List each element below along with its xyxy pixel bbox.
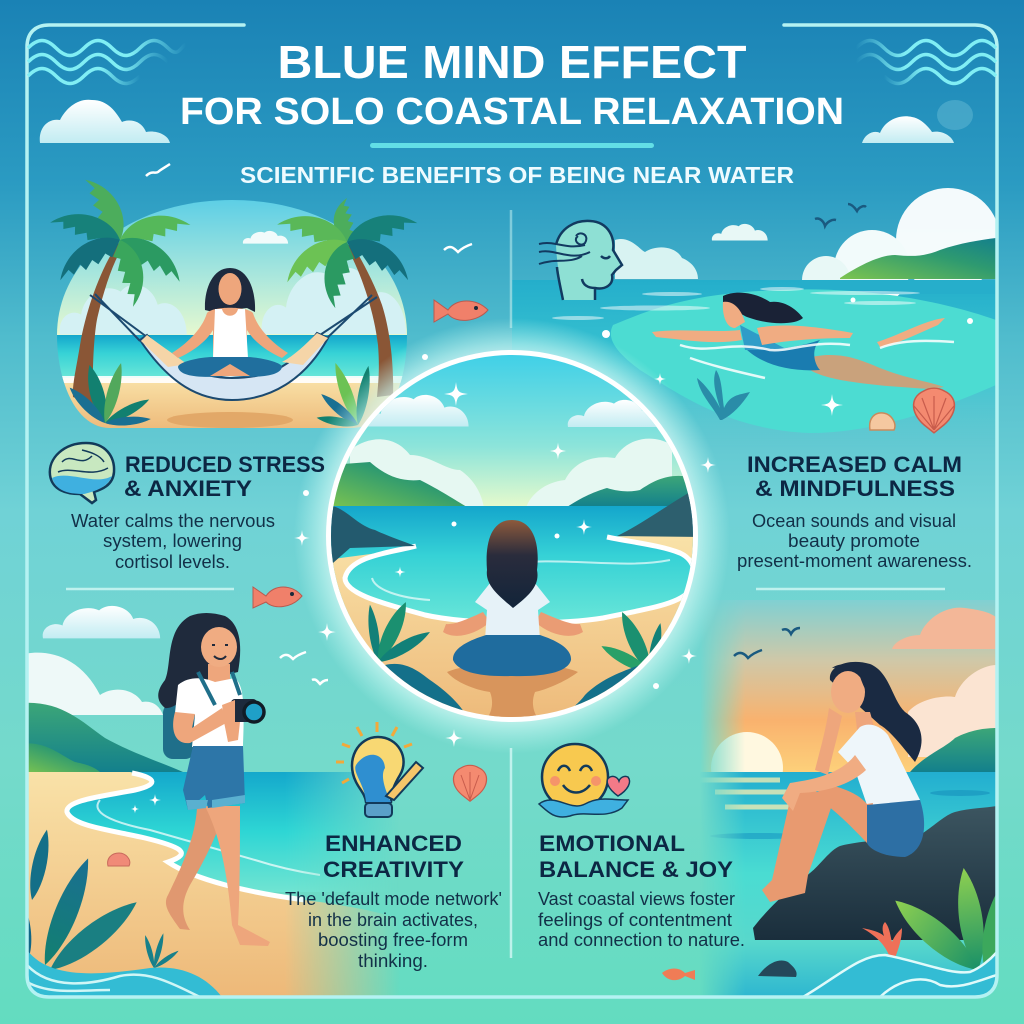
panel: enhanced creativity: [285, 722, 502, 971]
plants: [365, 599, 665, 722]
subtitle: SCIENTIFIC BENEFITS OF BEING NEAR WATER: [240, 162, 794, 188]
cloud small: [43, 606, 160, 638]
seaweed: [697, 370, 750, 420]
hill right: [910, 728, 997, 772]
sea: [70, 772, 388, 892]
woman sitting on rock: [762, 662, 924, 902]
panel: reduced stress: cortisol levels.: [115, 552, 230, 572]
woman walking with camera: [158, 613, 270, 946]
panel: increased calm: [737, 452, 972, 571]
shadow on sand: [447, 663, 578, 722]
woman meditating on beach: [443, 520, 583, 676]
palm fronds right: [275, 198, 420, 310]
hammock: [140, 333, 328, 400]
woman meditating in hammock: [172, 268, 288, 377]
panel: emotional balance: Vast coastal views foster: [538, 889, 735, 909]
icon: birds: [146, 164, 800, 684]
hammock ropes: [90, 294, 377, 341]
cloud behind head: [615, 239, 698, 279]
cloud big left: [20, 653, 163, 715]
sparkles and dots on water: [602, 298, 973, 416]
water highlights: [552, 287, 920, 320]
scene: bottom right sunset woman on rock: [662, 600, 1013, 998]
sand: [325, 535, 700, 730]
icon: small fish: [662, 968, 695, 980]
panel: increased calm: Ocean sounds and visual: [752, 511, 956, 531]
cloud big right: [802, 188, 996, 296]
rock: [753, 806, 997, 940]
shoreline: [345, 537, 694, 623]
panel: emotional balance: EMOTIONAL: [539, 831, 685, 856]
cloud peach: [892, 608, 997, 649]
bush right: [316, 361, 373, 429]
panel: enhanced creativity: CREATIVITY: [323, 857, 464, 882]
scene: woman in hammock between palms: [48, 171, 420, 432]
icon: small shell: [870, 413, 895, 430]
panel: reduced stress: Water calms the nervous: [71, 511, 275, 531]
big leaves: [28, 830, 178, 969]
shoreline: [67, 773, 305, 900]
palm trunk left: [73, 243, 122, 405]
rocks: [325, 505, 415, 570]
leaves: [895, 868, 996, 970]
sparkles on water: [130, 794, 161, 814]
title: FOR SOLO COASTAL RELAXATION: [180, 91, 844, 133]
icon: lightbulb with wave: [336, 722, 423, 817]
sand: [28, 772, 393, 996]
coral: [862, 922, 902, 958]
waves bottom right: [803, 952, 997, 997]
icon: shell center: [453, 765, 487, 801]
panel: enhanced creativity: ENHANCED: [325, 831, 462, 856]
panel: enhanced creativity: in the brain activates,: [308, 910, 478, 930]
panel: emotional balance: BALANCE & JOY: [539, 857, 733, 882]
panel: increased calm: & MINDFULNESS: [755, 476, 955, 501]
panel: reduced stress: [50, 443, 325, 572]
panel: enhanced creativity: thinking.: [358, 951, 428, 971]
icon: big shell: [914, 388, 954, 433]
palm fronds left: [48, 171, 193, 309]
palm trunk right: [346, 244, 393, 397]
icon: shell on sand: [108, 853, 130, 866]
panel: enhanced creativity: boosting free-form: [318, 930, 468, 950]
bush left: [66, 362, 151, 427]
title: BLUE MIND EFFECT: [278, 36, 746, 88]
waves bottom left: [27, 950, 222, 997]
swimmer: [652, 293, 954, 389]
panel: emotional balance: [538, 744, 745, 950]
icon: fish top: [434, 300, 488, 322]
panel: reduced stress: & ANXIETY: [124, 476, 252, 501]
icon: brain: [50, 443, 114, 503]
title: [180, 36, 844, 133]
icon: birds: [815, 204, 866, 226]
panel: increased calm: beauty promote: [788, 531, 920, 551]
panel: emotional balance: feelings of contentment: [538, 910, 732, 930]
sparkles outside: [294, 354, 716, 747]
scene: bottom left walking photographer: [28, 606, 393, 996]
stone: [758, 961, 797, 977]
panel: increased calm: present-moment awareness.: [737, 551, 972, 571]
bright water blob: [611, 289, 996, 433]
wave decoration left: [28, 40, 186, 84]
hills: [20, 703, 183, 772]
panel: increased calm: INCREASED CALM: [747, 452, 962, 477]
panel: reduced stress: system, lowering: [103, 531, 242, 551]
title divider: [370, 143, 654, 148]
cloud top left: [40, 100, 170, 143]
panel: enhanced creativity: The 'default mode network': [285, 889, 502, 909]
icon: smiley with wave and heart: [539, 744, 630, 817]
scene: woman swimming in the sea: [512, 188, 996, 434]
divider lines: [66, 210, 945, 958]
icon: fish left: [253, 587, 302, 608]
wave decoration right: [856, 40, 996, 84]
cloud small: [712, 224, 768, 240]
center circle scene: [294, 318, 730, 754]
panel: reduced stress: REDUCED STRESS: [125, 452, 325, 477]
cloud sunset white: [908, 665, 997, 757]
sparkles inside: [394, 382, 592, 578]
icon: head with waves: [539, 221, 622, 300]
cloud top right: [862, 100, 973, 143]
panel: emotional balance: and connection to nature.: [538, 930, 745, 950]
